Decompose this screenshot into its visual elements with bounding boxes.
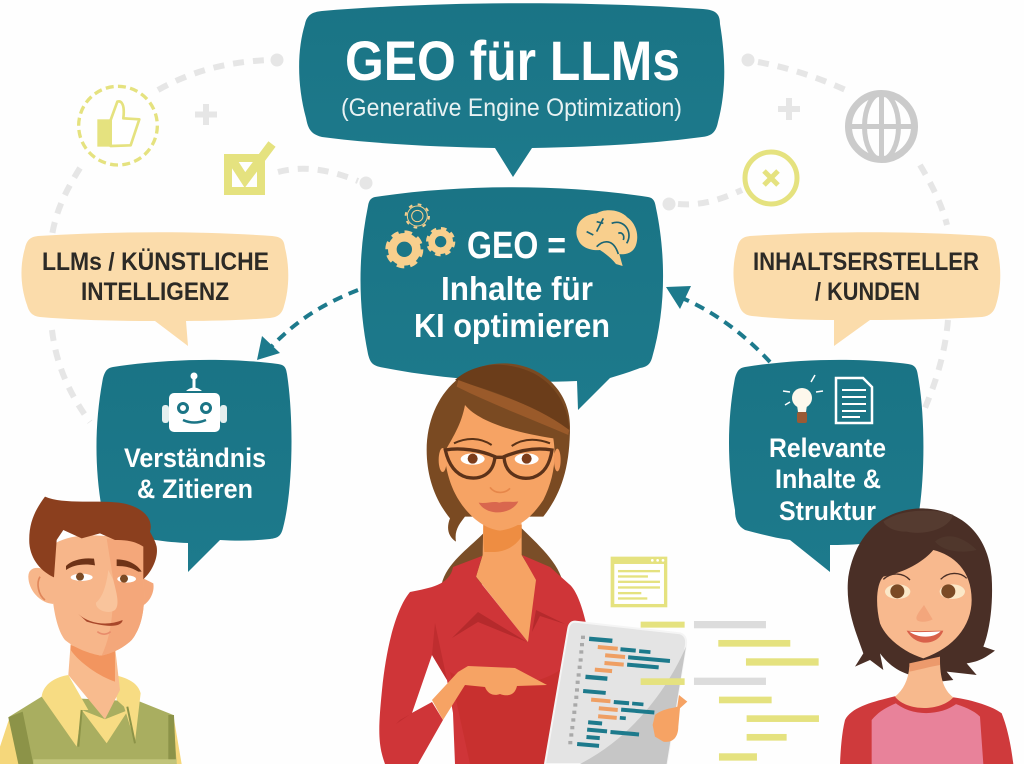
shirt bbox=[379, 555, 586, 764]
nose bbox=[490, 487, 510, 492]
hair back bbox=[848, 508, 995, 682]
ponytail bbox=[442, 527, 563, 585]
tee bbox=[840, 696, 1013, 764]
text: Inhalte &: Inhalte & bbox=[775, 464, 881, 494]
hand holding tablet bbox=[653, 695, 687, 742]
hair bbox=[29, 497, 157, 579]
text: KI optimieren: KI optimieren bbox=[414, 307, 610, 344]
man bbox=[0, 497, 182, 764]
face bbox=[52, 535, 144, 656]
glasses bbox=[445, 449, 552, 478]
text: & Zitieren: & Zitieren bbox=[137, 474, 253, 504]
text: Relevante: Relevante bbox=[769, 433, 886, 463]
woman with tablet bbox=[379, 363, 687, 764]
text: LLMs / KÜNSTLICHE: LLMs / KÜNSTLICHE bbox=[42, 247, 269, 276]
ears bbox=[28, 568, 53, 604]
mouth bbox=[907, 631, 943, 643]
subtitle: (Generative Engine Optimization) bbox=[341, 94, 682, 122]
dashed connector arcs bbox=[50, 54, 948, 422]
mouth bbox=[78, 614, 123, 626]
icon: robot bbox=[162, 372, 227, 432]
arrow: to left bubble bbox=[257, 290, 358, 360]
eyes bbox=[461, 453, 485, 465]
text: INTELLIGENZ: INTELLIGENZ bbox=[81, 278, 229, 306]
text: Verständnis: Verständnis bbox=[124, 443, 266, 473]
panel: right label bubble bbox=[733, 232, 1000, 346]
icon: plus right bbox=[778, 98, 800, 120]
icon: check box bbox=[228, 144, 272, 191]
icon: plus left bbox=[195, 104, 217, 125]
arrow: to central bubble bbox=[666, 286, 770, 362]
neck and chest bbox=[476, 520, 537, 643]
text: GEO =: GEO = bbox=[467, 225, 566, 267]
floating code bars bbox=[641, 621, 819, 761]
face bbox=[445, 405, 555, 531]
hair fringe bbox=[455, 365, 569, 434]
icon: lightbulb bbox=[783, 375, 823, 423]
nose bbox=[96, 570, 118, 612]
icon: thumbs up bbox=[79, 86, 157, 165]
collar bbox=[42, 675, 88, 747]
text: Struktur: Struktur bbox=[779, 496, 876, 526]
forearm and pointing hand bbox=[432, 666, 547, 720]
icon: globe bbox=[848, 94, 914, 160]
panel: right teal bubble bbox=[729, 360, 923, 572]
eyebrows bbox=[883, 573, 967, 580]
panel: title bubble bbox=[299, 3, 724, 177]
tablet bbox=[545, 622, 686, 764]
eyes bbox=[71, 574, 93, 581]
eyes bbox=[885, 584, 910, 599]
icon: code window bbox=[611, 557, 667, 607]
neck bbox=[895, 660, 953, 708]
text: INHALTSERSTELLER: INHALTSERSTELLER bbox=[753, 248, 979, 276]
panel: left label bubble bbox=[21, 232, 288, 346]
inner shirt bbox=[82, 710, 128, 743]
panel: central GEO bubble bbox=[360, 187, 663, 410]
nose bbox=[916, 605, 933, 622]
title: GEO für LLMs bbox=[345, 29, 680, 92]
icon: brain bbox=[576, 210, 637, 266]
text: Inhalte für: Inhalte für bbox=[441, 270, 593, 307]
icon: document bbox=[836, 378, 872, 423]
shirt sleeves and vest bbox=[0, 718, 20, 764]
code lines bbox=[577, 637, 670, 748]
girl bbox=[840, 508, 1013, 764]
icon: x circle bbox=[745, 152, 797, 204]
lips bbox=[479, 501, 518, 512]
icon: gears bbox=[388, 204, 453, 266]
eyebrows bbox=[454, 439, 550, 446]
neck bbox=[68, 643, 120, 719]
face bbox=[877, 550, 972, 658]
hair back bbox=[427, 363, 570, 542]
fringe bbox=[883, 511, 953, 533]
eyebrows bbox=[66, 558, 142, 572]
text: / KUNDEN: / KUNDEN bbox=[815, 278, 920, 306]
panel: left teal bubble bbox=[96, 360, 292, 572]
